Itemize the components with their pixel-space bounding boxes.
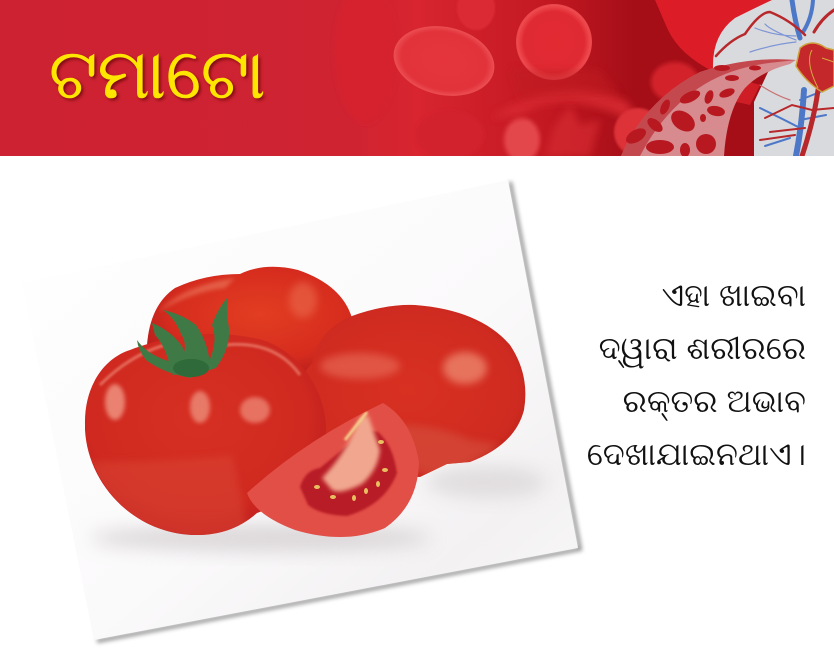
anatomy figure panel — [621, 0, 834, 157]
tomato wedge — [247, 403, 419, 537]
photo card with shadow — [22, 180, 580, 641]
title: ଟମାଟୋ — [49, 35, 265, 113]
body text: ଏହା ଖାଇବା — [662, 277, 806, 313]
icon: heart — [796, 43, 834, 92]
banner background — [0, 0, 834, 162]
body text — [587, 277, 806, 472]
front tomato — [85, 334, 326, 535]
back tomato — [147, 267, 352, 372]
stem — [137, 297, 229, 378]
blood vessel cross-section — [621, 59, 796, 156]
right tomato — [306, 304, 526, 477]
body text: ଦ୍ୱାରା ଶରୀରରେ — [599, 330, 806, 366]
body text: ଦେଖାଯାଇନଥାଏ। — [587, 436, 806, 472]
body text: ରକ୍ତର ଅଭାବ — [623, 383, 806, 419]
red blood cells — [394, 0, 772, 156]
tomato group — [85, 267, 545, 552]
